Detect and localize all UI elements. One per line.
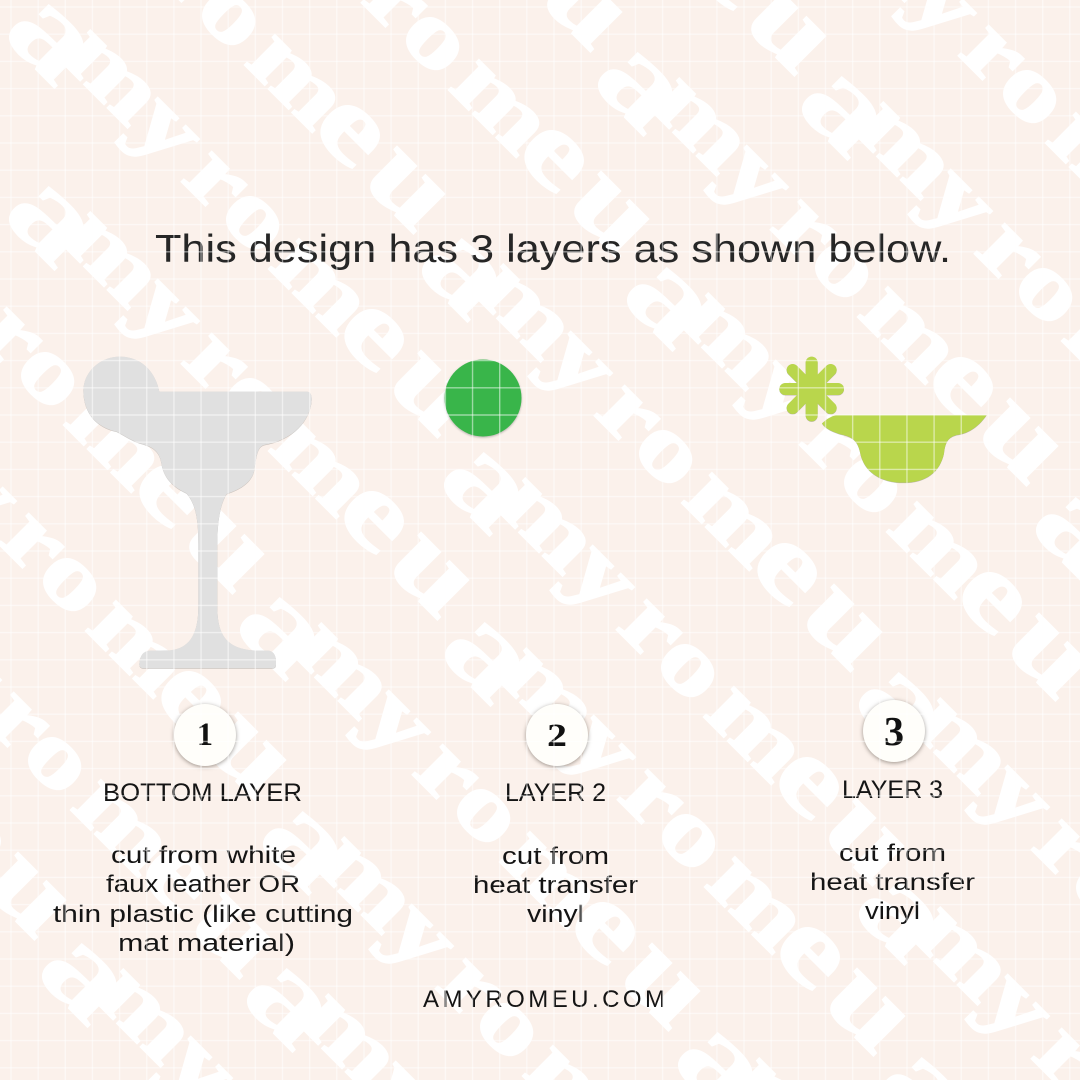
column 3: description: vinyl: [865, 898, 920, 925]
column 3: description: [810, 840, 975, 925]
column 3: layer 3 heading: LAYER 3: [842, 776, 943, 804]
column 1: number badge: [174, 704, 236, 766]
column 2: description: vinyl: [527, 901, 584, 928]
column 3: description: cut from: [839, 840, 946, 867]
column 1: bottom layer heading: BOTTOM LAYER: [103, 779, 302, 807]
background watermark pattern: a: [394, 191, 546, 343]
bowl of the glass: [822, 415, 987, 483]
background watermark pattern: a: [774, 29, 926, 181]
column 1: description: cut from white: [111, 842, 296, 869]
background watermark pattern: a: [219, 921, 371, 1073]
background watermark pattern: my rom: [457, 235, 808, 586]
column 1: description: faux leather OR: [106, 871, 300, 898]
background watermark pattern: my rom: [275, 594, 626, 945]
background watermark pattern: my rom: [480, 619, 831, 970]
background watermark pattern: a: [417, 575, 569, 727]
background watermark pattern: a: [235, 764, 387, 916]
background watermark pattern: eu: [133, 628, 325, 819]
icon: margarita glass, bottom layer: [83, 357, 312, 668]
column 2: number badge: 2: [547, 718, 567, 754]
background watermark pattern: a: [831, 625, 983, 777]
background watermark pattern: my rom: [44, 183, 395, 534]
background watermark pattern: eu: [292, 62, 484, 253]
background watermark pattern: a: [14, 896, 166, 1048]
background watermark pattern: eu: [316, 266, 508, 457]
background watermark pattern: eu: [496, 87, 688, 278]
background watermark pattern: my rom: [633, 49, 984, 400]
column 1: description: mat material): [118, 930, 295, 957]
background watermark pattern: eu: [547, 859, 739, 1050]
background watermark pattern: eu: [316, 448, 508, 639]
column 2: description: cut from: [502, 843, 609, 870]
footer website: AMYROMEU.COM: [423, 986, 665, 1013]
column 3: number badge: 3: [884, 708, 904, 754]
background watermark pattern: my rom: [44, 1, 395, 352]
column 2: description: [473, 843, 638, 928]
column 2: description: heat transfer: [473, 872, 638, 899]
background watermark pattern: eu: [729, 500, 921, 691]
background watermark pattern: eu: [752, 884, 944, 1075]
background watermark pattern: a: [599, 220, 751, 372]
column 2: number badge: [526, 704, 588, 766]
icon: lime slice and bowl, layer 3: [785, 363, 987, 483]
background watermark pattern: my rom: [479, 449, 830, 800]
background watermark pattern: eu: [751, 714, 943, 905]
background watermark pattern: a: [212, 550, 364, 702]
background watermark pattern: eu: [111, 422, 303, 613]
column 3: number badge: [863, 700, 925, 762]
column 1: description: thin plastic (like cutting: [53, 901, 353, 928]
column 3: description: heat transfer: [810, 869, 975, 896]
background watermark pattern: a: [416, 405, 568, 557]
flower-shaped lime wedge: [785, 363, 838, 415]
background watermark pattern: a: [570, 5, 722, 157]
column 2: layer 2 heading: LAYER 2: [505, 779, 606, 807]
icon: green circle, layer 2: [444, 360, 522, 436]
title: This design has 3 layers as shown below.: [155, 228, 951, 271]
background watermark pattern: eu: [118, 807, 310, 998]
column 1: number badge: 1: [197, 717, 213, 753]
column 1: description: [53, 842, 353, 957]
background watermark pattern: my rom: [662, 264, 1013, 615]
background watermark pattern: a: [831, 834, 983, 986]
